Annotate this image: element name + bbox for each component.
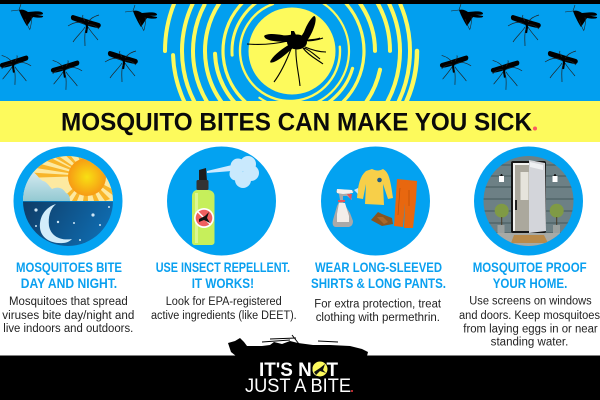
concentric yellow rings	[163, 4, 420, 101]
icon: long sleeve shirt, pants, boots, spray	[321, 146, 430, 256]
text block: mosquitoes bite day and night: MOSQUITOES BITE	[16, 259, 122, 275]
text block: mosquito proof your home	[459, 259, 600, 349]
text block: mosquito proof your home: standing water.	[491, 337, 568, 349]
title banner: MOSQUITO BITES CAN MAKE YOU SICK	[61, 108, 532, 136]
footer black band with brush stroke	[0, 335, 600, 400]
text block: use insect repellent: active ingredients (like DEET).	[151, 310, 297, 322]
icon: insect repellent spray	[167, 146, 276, 256]
logo: It's not just a bite	[245, 360, 353, 397]
text block: wear long sleeves: WEAR LONG-SLEEVED	[315, 259, 442, 275]
mosquito swarm: left	[0, 4, 157, 90]
text block: mosquitoes bite day and night: live indoors and outdoors.	[3, 323, 133, 335]
icon: large mosquito on yellow sun	[247, 8, 336, 94]
text block: mosquitoes bite day and night: viruses bite day/night and	[2, 310, 134, 322]
title banner	[0, 101, 600, 142]
icon: day and night	[14, 146, 122, 256]
logo: It's not just a bite: IT'S NOT	[259, 360, 338, 381]
text block: use insect repellent	[151, 259, 297, 322]
text block: use insect repellent: IT WORKS!	[192, 275, 254, 291]
text block: wear long sleeves: SHIRTS & LONG PANTS.	[311, 275, 446, 291]
logo: It's not just a bite: JUST A BITE	[245, 376, 351, 397]
text block: wear long sleeves: For extra protection, treat	[314, 299, 442, 311]
text block: mosquito proof your home: Use screens on windows	[469, 295, 592, 307]
text block: mosquitoes bite day and night: Mosquitoes that spread	[9, 296, 128, 308]
text block: mosquitoes bite day and night	[2, 259, 134, 335]
text block: mosquito proof your home: from laying eggs in or near	[463, 323, 598, 335]
text block: mosquito proof your home: YOUR HOME.	[493, 275, 567, 291]
text block: use insect repellent: Look for EPA-registered	[166, 296, 282, 308]
top black bar	[0, 0, 600, 4]
text block: use insect repellent: USE INSECT REPELLENT.	[156, 259, 290, 275]
mosquito swarm: right	[440, 4, 597, 90]
text block: wear long sleeves	[311, 259, 446, 324]
panel: blue header band	[0, 4, 600, 101]
text block: mosquitoes bite day and night: DAY AND NIGHT.	[21, 275, 117, 291]
text block: wear long sleeves: clothing with permethrin.	[316, 312, 440, 324]
icon: house door with screen	[474, 146, 583, 256]
